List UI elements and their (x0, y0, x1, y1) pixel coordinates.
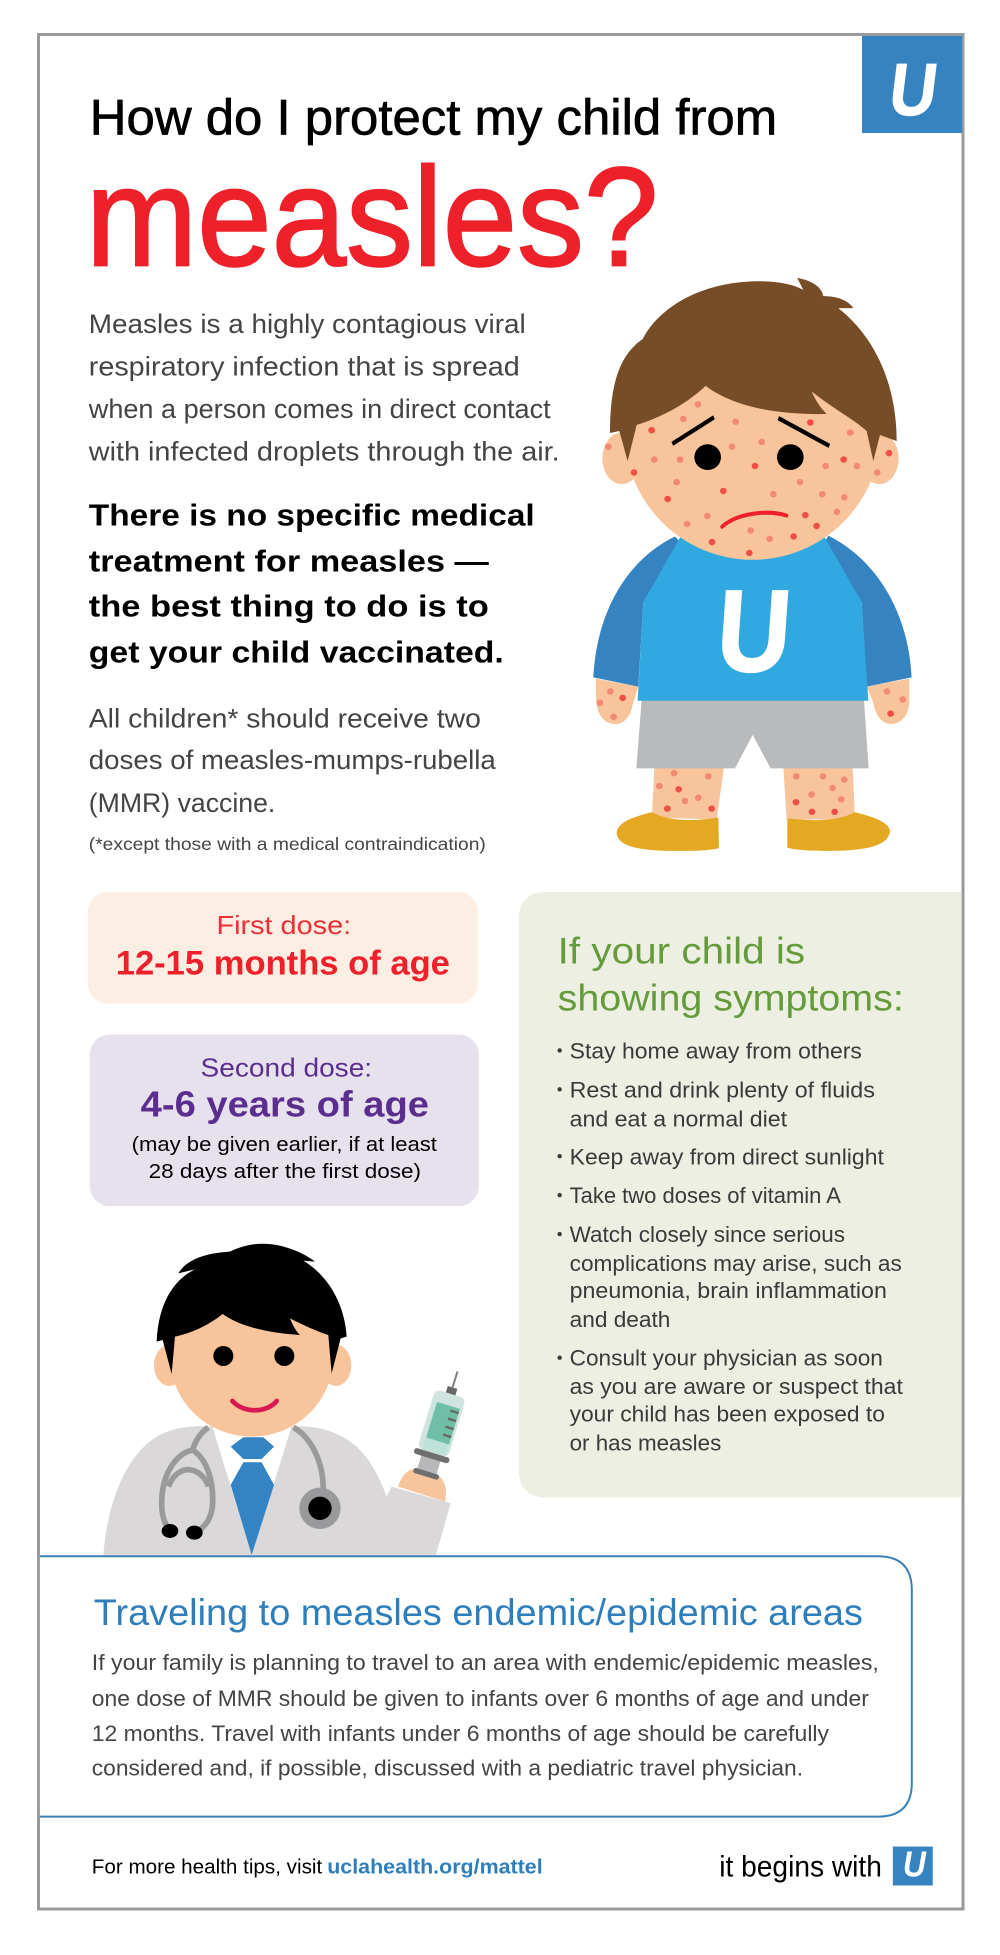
panel: first dose: First dose: (216, 912, 351, 940)
panel: second dose: Second dose: (201, 1054, 372, 1082)
panel: traveling to endemic areas (40, 1556, 912, 1817)
panel: first dose (88, 892, 478, 1004)
text block: no specific treatment: treatment for measles — (89, 544, 489, 579)
title: measles? (86, 138, 658, 295)
symptoms list: Stay home away from others (570, 1038, 862, 1063)
text block: MMR recommendation (89, 703, 496, 854)
symptoms heading (558, 931, 904, 1019)
panel: symptoms (519, 892, 962, 1497)
symptoms list: as you are aware or suspect that (570, 1374, 903, 1399)
panel: second dose: (may be given earlier, if at least (132, 1134, 437, 1156)
footer: more health tips link (92, 1856, 543, 1878)
symptoms list: Rest and drink plenty of fluids (570, 1077, 875, 1102)
text block: MMR recommendation: All children* should receive two (89, 703, 481, 733)
travel text: If your family is planning to travel to an area with endemic/epidemic measles, (92, 1650, 879, 1675)
panel: first dose: 12-15 months of age (116, 945, 450, 983)
text block: MMR recommendation: (MMR) vaccine. (89, 788, 275, 818)
symptoms list: and death (570, 1307, 670, 1332)
logo: U badge: U (885, 48, 942, 131)
symptoms list: Keep away from direct sunlight (570, 1145, 884, 1170)
symptoms list: pneumonia, brain inflammation (570, 1278, 887, 1303)
text block: no specific treatment (89, 498, 535, 669)
text block: MMR recommendation: doses of measles-mumps-rubella (89, 745, 496, 775)
footer: more health tips link: For more health tips, visit (92, 1856, 323, 1878)
title: How do I protect my child from (90, 90, 777, 146)
title (86, 90, 777, 295)
illustration: doctor with syringe (103, 1244, 475, 1555)
logo: U badge (862, 36, 962, 133)
travel text: one dose of MMR should be given to infants over 6 months of age and under (92, 1686, 869, 1711)
travel heading: Traveling to measles endemic/epidemic areas (94, 1592, 863, 1633)
illustration: sick boy with measles (593, 278, 912, 851)
symptoms list: Take two doses of vitamin A (570, 1183, 841, 1208)
footer: it begins with U (719, 1843, 933, 1885)
footer: it begins with U: it begins with (719, 1850, 882, 1883)
travel text (92, 1650, 879, 1781)
symptoms list: Watch closely since serious (570, 1222, 845, 1247)
symptoms heading: showing symptoms: (558, 978, 904, 1019)
text block: MMR recommendation: (*except those with a medical contraindication) (89, 834, 486, 854)
travel text: considered and, if possible, discussed with a pediatric travel physician. (92, 1756, 803, 1781)
panel: second dose: 4-6 years of age (141, 1083, 429, 1124)
symptoms list: or has measles (570, 1431, 721, 1456)
travel text: 12 months. Travel with infants under 6 months of age should be carefully (92, 1721, 829, 1746)
panel: second dose (90, 1035, 479, 1206)
footer: more health tips link: uclahealth.org/mattel (327, 1856, 543, 1878)
symptoms list: Consult your physician as soon (570, 1346, 883, 1371)
text block: measles description: respiratory infection that is spread (89, 352, 520, 382)
footer: it begins with U: U (903, 1843, 927, 1884)
text block: measles description: with infected droplets through the air. (88, 436, 560, 466)
symptoms list: your child has been exposed to (570, 1402, 885, 1427)
symptoms list (557, 1038, 903, 1456)
panel: second dose: 28 days after the first dose) (149, 1161, 421, 1183)
symptoms heading: If your child is (558, 931, 805, 972)
symptoms list: and eat a normal diet (570, 1106, 787, 1131)
text block: measles description: Measles is a highly contagious viral (89, 309, 526, 339)
text block: measles description: when a person comes in direct contact (88, 394, 551, 424)
text block: measles description (88, 309, 560, 466)
symptoms list: complications may arise, such as (570, 1251, 902, 1276)
text block: no specific treatment: get your child vaccinated. (89, 634, 504, 669)
shirt logo: U: U (713, 566, 795, 696)
text block: no specific treatment: the best thing to do is to (89, 589, 489, 624)
text block: no specific treatment: There is no specific medical (89, 498, 535, 533)
